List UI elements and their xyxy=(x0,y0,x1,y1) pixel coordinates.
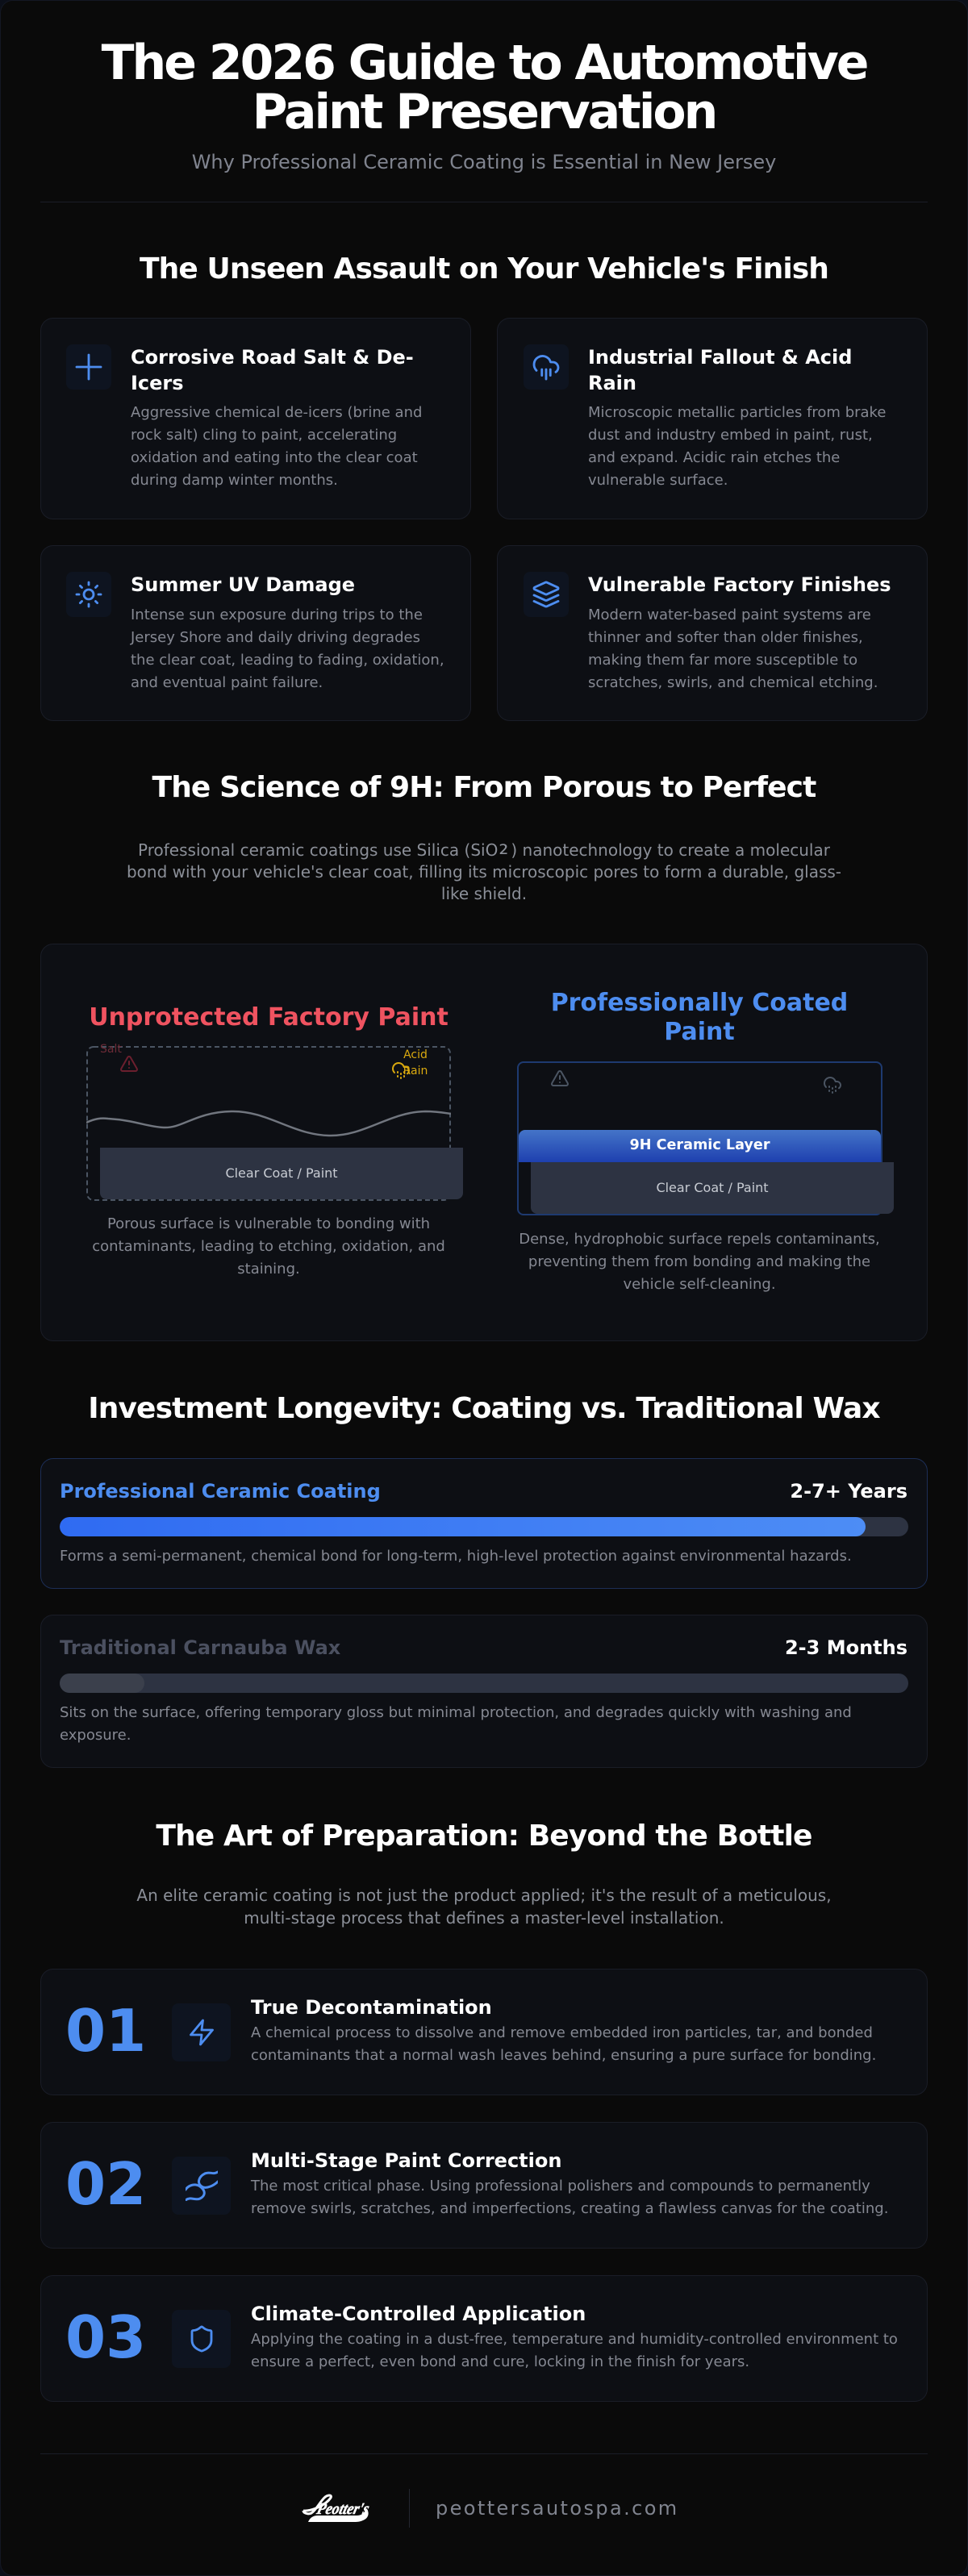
card text: Aggressive chemical de-icers (brine and xyxy=(131,404,422,421)
card text: during damp winter months. xyxy=(131,472,338,489)
card text: Intense sun exposure during trips to the xyxy=(131,606,423,623)
card heading xyxy=(588,346,852,394)
label: salt: Salt xyxy=(100,1043,122,1056)
caption: unprotected: staining. xyxy=(237,1261,300,1278)
card heading: Icers xyxy=(131,372,184,394)
text: Forms a semi-permanent, chemical bond for long-term, high-level protection against environmental hazards. xyxy=(60,1548,852,1565)
step text: The most critical phase. Using professional polishers and compounds to permanently xyxy=(251,2178,870,2195)
footer website: peottersautospa.com xyxy=(436,2497,679,2520)
card heading: Rain xyxy=(588,372,636,394)
card text: scratches, swirls, and chemical etching. xyxy=(588,674,878,691)
icon: rain cloud xyxy=(524,344,569,390)
diagram: coated paint xyxy=(517,1061,894,1215)
panel: ceramic longevity xyxy=(40,1458,928,1589)
card heading: Vulnerable Factory Finishes xyxy=(588,573,891,596)
card text xyxy=(131,404,422,489)
icon: shield xyxy=(172,2310,231,2368)
preparation intro text: An elite ceramic coating is not just the product applied; it's the result of a meticulous, xyxy=(136,1886,832,1905)
diagram: unprotected paint xyxy=(86,1043,463,1201)
card text: rock salt) cling to paint, accelerating xyxy=(131,427,397,444)
card heading xyxy=(131,346,414,394)
icon: deflected rain xyxy=(824,1077,841,1094)
heading: unprotected: Unprotected Factory Paint xyxy=(89,1003,449,1032)
value: 2-7+ Years xyxy=(790,1480,908,1503)
clear coat layer xyxy=(100,1148,463,1199)
panel: uv damage xyxy=(40,545,471,721)
step text: remove swirls, scratches, and imperfections, creating a flawless canvas for the coating. xyxy=(251,2200,888,2217)
heading: unseen assault: The Unseen Assault on Your Vehicle's Finish xyxy=(140,252,828,286)
panel: step 1 xyxy=(40,1969,928,2095)
step text xyxy=(251,2331,898,2370)
title: Paint Preservation xyxy=(252,84,716,140)
footer logo xyxy=(302,2494,371,2522)
text xyxy=(60,1704,852,1744)
preparation intro text xyxy=(136,1886,832,1928)
science intro text xyxy=(127,832,841,903)
caption: coated: Dense, hydrophobic surface repels contaminants, xyxy=(519,1231,880,1248)
bar xyxy=(60,1517,908,1536)
card text: and expand. Acidic rain etches the xyxy=(588,449,840,466)
card heading: Summer UV Damage xyxy=(131,573,355,596)
preparation intro text: multi-stage process that defines a master-level installation. xyxy=(244,1908,724,1928)
step text xyxy=(250,2178,888,2217)
caption: coated: vehicle self-cleaning. xyxy=(623,1276,776,1293)
heading: science of 9H: The Science of 9H: From Porous to Perfect xyxy=(152,771,816,804)
step text: ensure a perfect, even bond and cure, locking in the finish for years. xyxy=(251,2353,749,2370)
caption: unprotected xyxy=(92,1215,445,1278)
card text: making them far more susceptible to xyxy=(588,652,857,669)
step heading: Multi-Stage Paint Correction xyxy=(251,2149,561,2172)
card text: thinner and softer than older finishes, xyxy=(588,629,863,646)
card text: the clear coat, leading to fading, oxidation, xyxy=(131,652,444,669)
subtitle: Why Professional Ceramic Coating is Essential in New Jersey xyxy=(192,151,776,173)
icon: layers xyxy=(524,572,569,617)
heading: coated xyxy=(551,989,848,1046)
card text: Modern water-based paint systems are xyxy=(588,606,871,623)
caption: coated: preventing them from bonding and making the xyxy=(528,1253,870,1270)
science intro text: Professional ceramic coatings use Silica (SiO₂) nanotechnology to create a molecular xyxy=(138,832,830,861)
heading: longevity: Investment Longevity: Coating vs. Traditional Wax xyxy=(88,1392,880,1425)
title xyxy=(102,35,867,140)
science intro text: bond with your vehicle's clear coat, filling its microscopic pores to form a durable, glass- xyxy=(127,862,841,882)
caption: unprotected: Porous surface is vulnerable to bonding with xyxy=(107,1215,430,1232)
card heading: Corrosive Road Salt & De- xyxy=(131,346,414,369)
text: exposure. xyxy=(60,1727,131,1744)
bar xyxy=(60,1674,908,1693)
step text: A chemical process to dissolve and remove embedded iron particles, tar, and bonded xyxy=(251,2024,873,2041)
ceramic layer: 9H Ceramic Layer xyxy=(629,1137,770,1153)
card text: dust and industry embed in paint, rust, xyxy=(588,427,873,444)
panel: wax longevity xyxy=(40,1615,928,1768)
heading: coated: Paint xyxy=(664,1018,735,1046)
icon: deflected warning xyxy=(551,1070,569,1086)
science intro text: like shield. xyxy=(441,884,527,903)
card text xyxy=(130,606,444,691)
icon: sun xyxy=(66,572,111,617)
card text: vulnerable surface. xyxy=(588,472,728,489)
card text: and eventual paint failure. xyxy=(131,674,323,691)
panel: step 3 xyxy=(40,2275,928,2402)
heading: preparation: The Art of Preparation: Beyond the Bottle xyxy=(156,1819,812,1853)
label: acid rain: Rain xyxy=(403,1065,428,1078)
panel: road salt xyxy=(40,318,471,519)
step number: 03 xyxy=(65,2303,146,2371)
panel: industrial fallout xyxy=(497,318,928,519)
step heading: True Decontamination xyxy=(251,1996,492,2019)
step number: 02 xyxy=(65,2150,146,2218)
label: acid rain xyxy=(403,1048,428,1078)
title: The 2026 Guide to Automotive xyxy=(102,35,866,91)
card text: Jersey Shore and daily driving degrades xyxy=(131,629,420,646)
step text xyxy=(251,2024,876,2064)
icon: swirl xyxy=(172,2157,231,2215)
icon: plus xyxy=(66,344,111,390)
step number: 01 xyxy=(65,1997,146,2065)
panel: factory finishes xyxy=(497,545,928,721)
icon: acid rain cloud xyxy=(392,1062,410,1079)
caption: coated xyxy=(519,1231,880,1293)
panel: paint comparison xyxy=(40,944,928,1341)
card heading: Industrial Fallout & Acid xyxy=(588,346,852,369)
card text xyxy=(588,404,886,489)
caption: unprotected: contaminants, leading to etching, oxidation, and xyxy=(92,1238,445,1255)
step text: Applying the coating in a dust-free, temperature and humidity-controlled environment to xyxy=(251,2331,898,2348)
card text: Microscopic metallic particles from brake xyxy=(588,404,886,421)
step heading: Climate-Controlled Application xyxy=(251,2303,586,2325)
icon: salt warning xyxy=(120,1056,138,1072)
heading: coated: Professionally Coated xyxy=(551,989,848,1017)
label: acid rain: Acid xyxy=(403,1048,428,1061)
clear coat layer: Clear Coat / Paint xyxy=(656,1180,769,1195)
panel: step 2 xyxy=(40,2122,928,2249)
clear coat layer xyxy=(531,1162,894,1214)
ceramic layer xyxy=(519,1130,881,1162)
label: Professional Ceramic Coating xyxy=(60,1480,381,1503)
label: Traditional Carnauba Wax xyxy=(60,1636,340,1659)
value: 2-3 Months xyxy=(785,1636,908,1659)
icon: bolt xyxy=(172,2003,231,2061)
text: Sits on the surface, offering temporary gloss but minimal protection, and degrades quickly with washing and xyxy=(60,1704,852,1721)
card text: oxidation and eating into the clear coat xyxy=(131,449,418,466)
clear coat layer: Clear Coat / Paint xyxy=(225,1165,338,1181)
card text xyxy=(588,606,878,691)
step text: contaminants that a normal wash leaves behind, ensuring a pure surface for bonding. xyxy=(251,2047,876,2064)
